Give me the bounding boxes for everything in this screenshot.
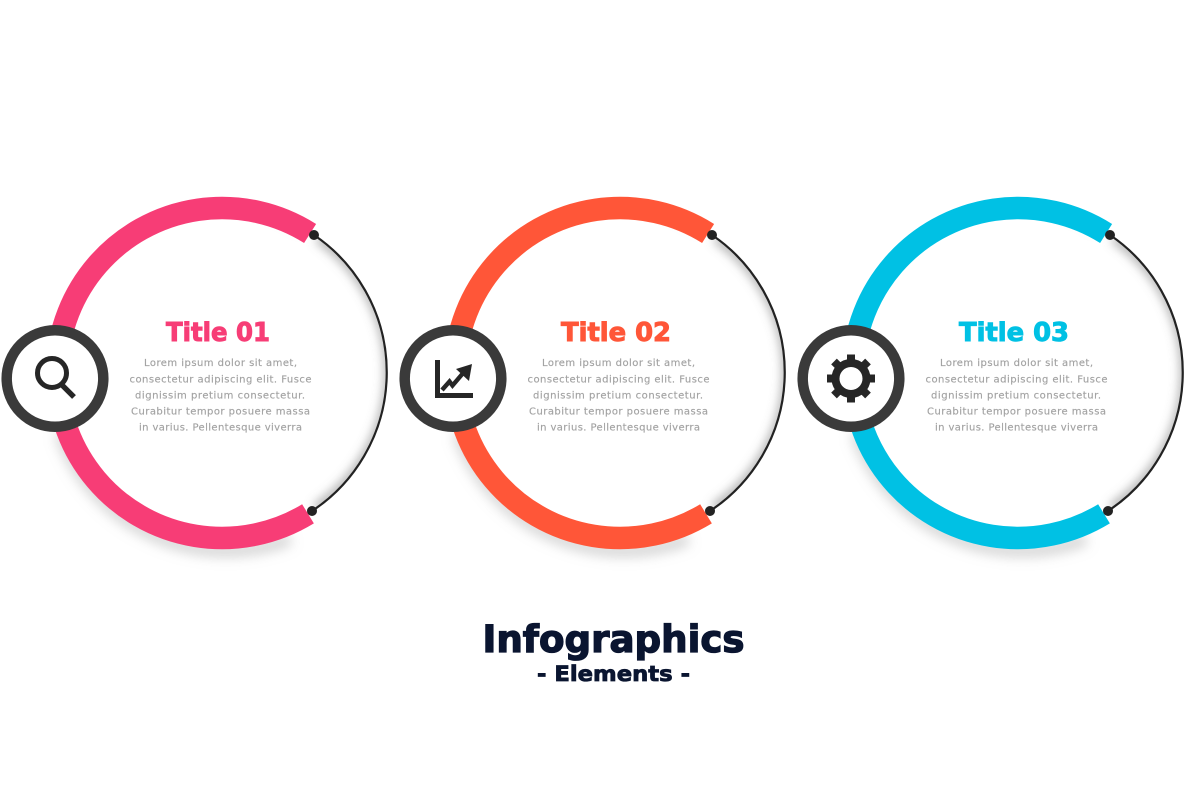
thick ring arc: orange xyxy=(455,208,708,538)
text block: step 3 body: Curabitur tempor posuere massa xyxy=(927,406,1106,418)
main title: Infographics xyxy=(482,618,744,661)
panel: step 3 xyxy=(803,203,1185,551)
thin connector arc with end dots xyxy=(1103,230,1183,516)
heading: Title 03: Title 03 xyxy=(959,318,1069,348)
text block: step 2 body xyxy=(528,358,710,434)
text block: step 1 body: in varius. Pellentesque viverra xyxy=(139,422,302,434)
subtitle: - Elements - xyxy=(537,662,690,686)
text block: step 1 body: Curabitur tempor posuere massa xyxy=(131,406,310,418)
thick ring arc: cyan xyxy=(853,208,1106,538)
thin connector arc with end dots xyxy=(307,230,387,516)
thick ring arc: pink xyxy=(57,208,310,538)
text block: step 3 body xyxy=(926,358,1108,434)
text block: step 2 body: consectetur adipiscing elit. Fusce xyxy=(528,374,710,386)
text block: step 1 body: Lorem ipsum dolor sit amet, xyxy=(144,358,297,369)
icon badge: gear xyxy=(803,330,899,427)
heading: Title 02: Title 02 xyxy=(561,318,671,348)
text block: step 1 body: dignissim pretium consectetur. xyxy=(135,390,305,402)
icon badge: magnifier xyxy=(7,330,103,427)
text block: step 3 body: Lorem ipsum dolor sit amet, xyxy=(940,358,1093,369)
text block: step 2 body: dignissim pretium consectetur. xyxy=(533,390,703,402)
text block: step 2 body: Lorem ipsum dolor sit amet, xyxy=(542,358,695,369)
text block: step 1 body: consectetur adipiscing elit. Fusce xyxy=(130,374,312,386)
panel: step 1 xyxy=(7,203,389,551)
text block: step 3 body: in varius. Pellentesque viverra xyxy=(935,422,1098,434)
text block: step 1 body xyxy=(130,358,312,434)
icon badge: growth chart xyxy=(405,330,501,427)
text block: step 2 body: Curabitur tempor posuere massa xyxy=(529,406,708,418)
thin connector arc with end dots xyxy=(705,230,785,516)
text block: step 3 body: consectetur adipiscing elit. Fusce xyxy=(926,374,1108,386)
panel: step 2 xyxy=(405,203,787,551)
text block: step 3 body: dignissim pretium consectetur. xyxy=(931,390,1101,402)
heading: Title 01: Title 01 xyxy=(166,318,270,348)
text block: step 2 body: in varius. Pellentesque viverra xyxy=(537,422,700,434)
